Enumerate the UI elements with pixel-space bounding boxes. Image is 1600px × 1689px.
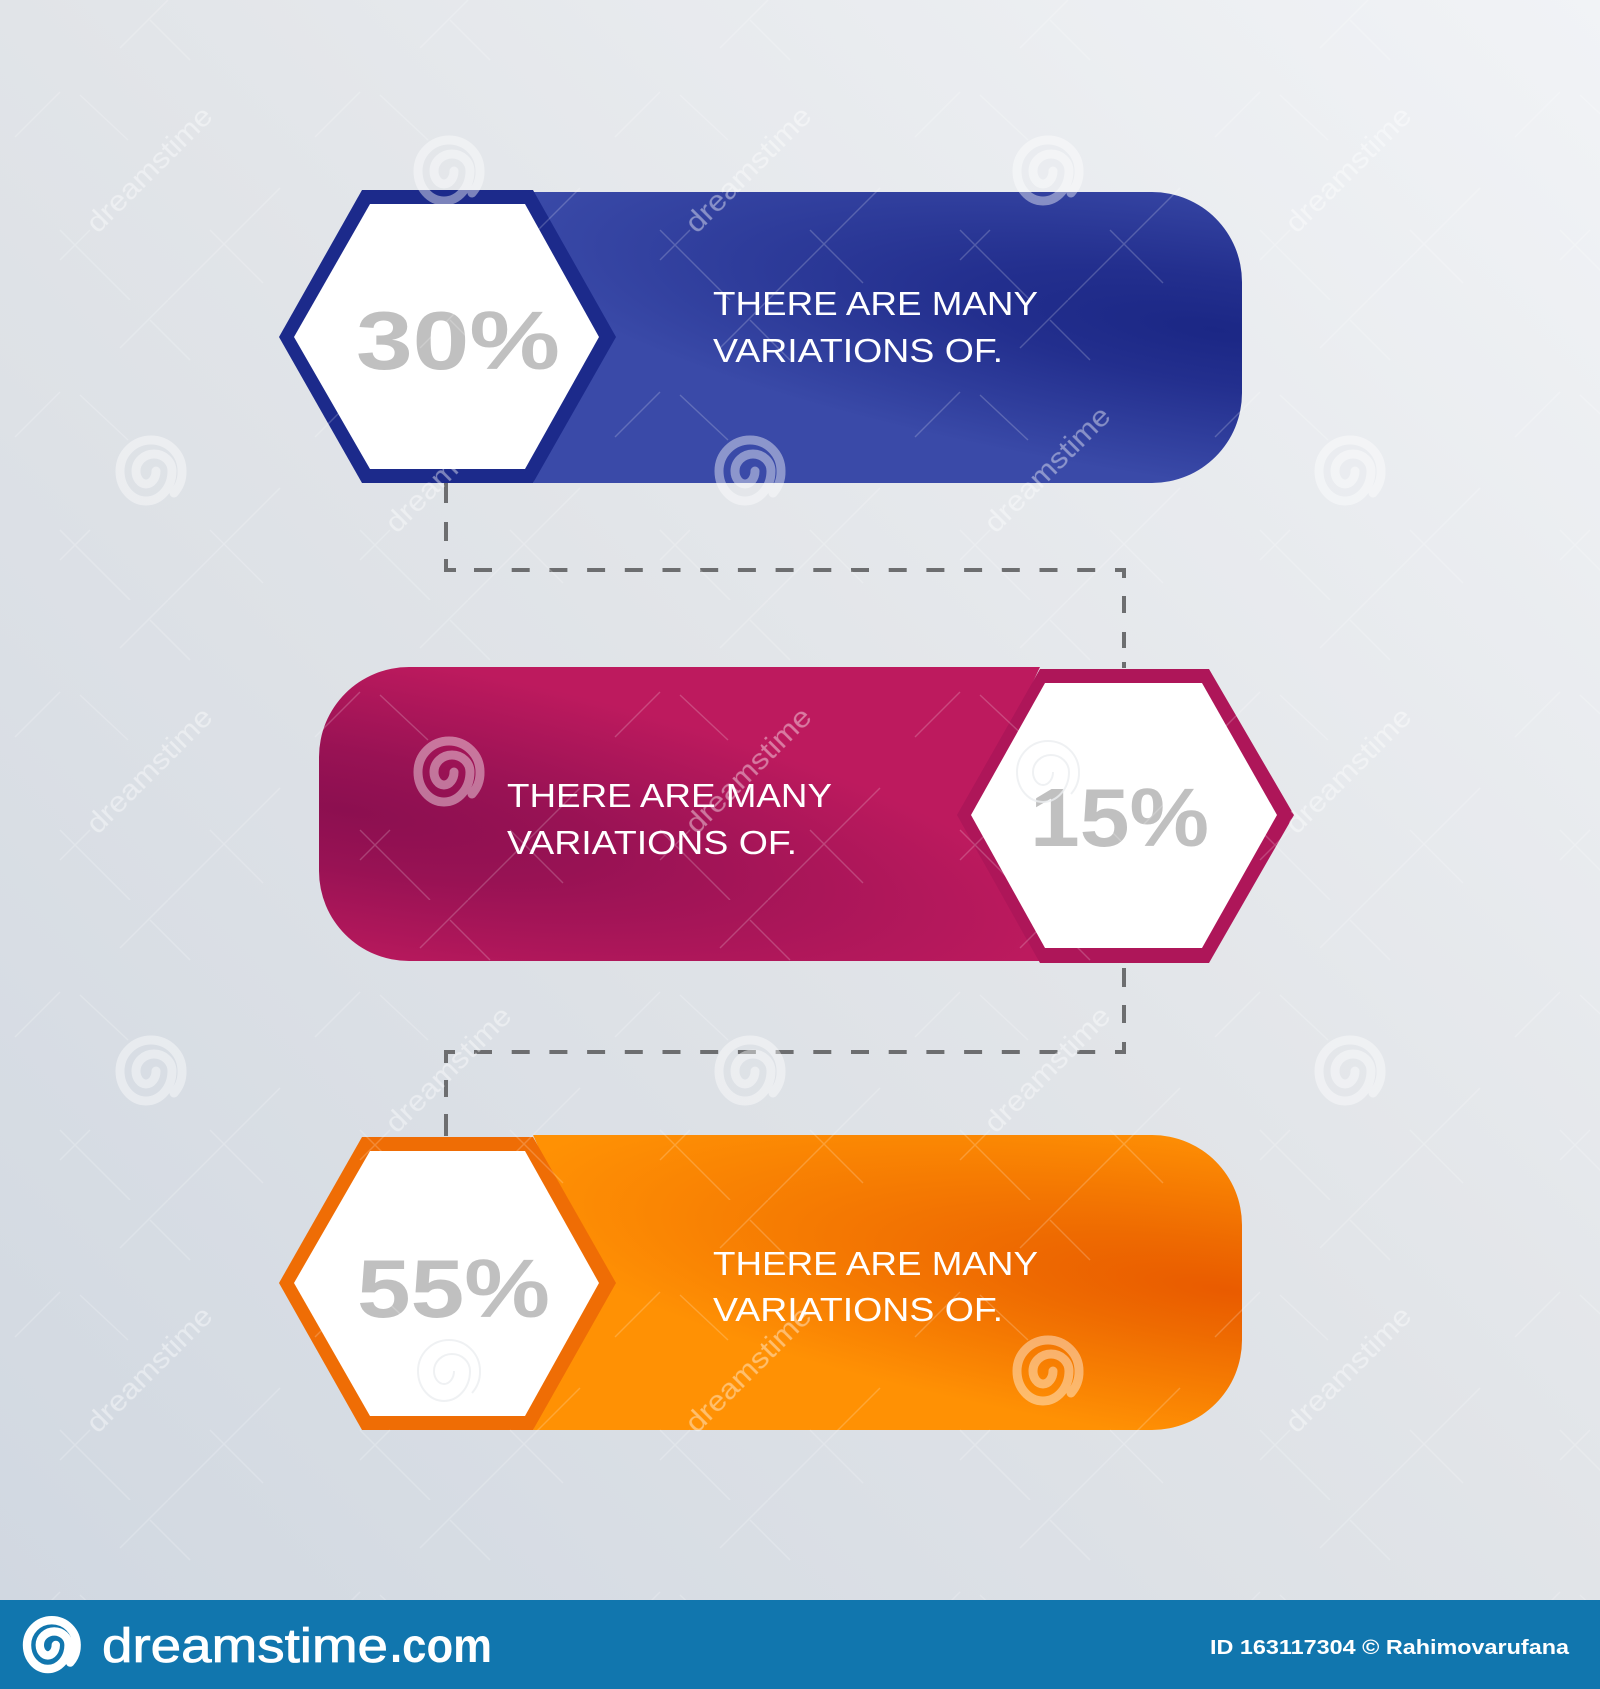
watermark: dreamstime text repeats: dreamstime <box>80 1300 219 1439</box>
watermark: dreamstime text repeats <box>80 100 1418 1439</box>
watermark: faint spirals on white hexagons <box>418 741 1079 1401</box>
panel: 55% orange bar <box>279 1135 1242 1430</box>
watermark: dreamstime text repeats: dreamstime <box>978 1000 1117 1139</box>
watermark: dreamstime text repeats: dreamstime <box>379 1000 518 1139</box>
hexagon: 15% <box>957 669 1294 963</box>
watermark: dreamstime text repeats: dreamstime <box>679 701 818 840</box>
text: magenta bar description: VARIATIONS OF. <box>507 825 797 862</box>
watermark: dreamstime text repeats: dreamstime <box>1279 701 1418 840</box>
orange bar shape <box>533 1135 1242 1430</box>
watermark: dreamstime text repeats: dreamstime <box>80 100 219 239</box>
value: 30%: 30% <box>356 294 560 387</box>
text: blue bar description: VARIATIONS OF. <box>713 333 1003 370</box>
logo wordmark: .com <box>390 1620 492 1673</box>
value: 55%: 55% <box>357 1242 550 1335</box>
text: magenta bar description: THERE ARE MANY <box>507 778 832 815</box>
watermark: spirals <box>120 140 1381 1401</box>
text: orange bar description: VARIATIONS OF. <box>713 1292 1003 1329</box>
value: 15%: 15% <box>1030 771 1209 864</box>
magenta bar shape <box>319 667 1040 961</box>
watermark: dreamstime text repeats: dreamstime <box>1279 1300 1418 1439</box>
logo wordmark: dreamstime <box>102 1620 388 1673</box>
watermark: dreamstime text repeats: dreamstime <box>379 400 518 539</box>
watermark: dreamstime text repeats: dreamstime <box>1279 100 1418 239</box>
panel: 30% blue bar <box>279 190 1242 483</box>
connector: dashed line from 15% to 55% <box>446 968 1124 1136</box>
image id and credit: ID 163117304 © Rahimovarufana <box>1210 1637 1570 1659</box>
text: orange bar description: THERE ARE MANY <box>713 1246 1038 1283</box>
logo wordmark <box>102 1620 492 1673</box>
footer bar <box>0 1600 1600 1689</box>
hexagon: 55% <box>279 1137 616 1430</box>
icon: dreamstime spiral logo <box>27 1620 77 1669</box>
connector: dashed line from 30% to 15% <box>446 483 1124 668</box>
watermark: dreamstime text repeats: dreamstime <box>80 701 219 840</box>
hexagon: 30% <box>279 190 616 483</box>
panel: 15% magenta bar <box>319 667 1294 963</box>
text: blue bar description: THERE ARE MANY <box>713 286 1038 323</box>
watermark: dreamstime text repeats: dreamstime <box>978 400 1117 539</box>
watermark: dreamstime text repeats: dreamstime <box>679 1300 818 1439</box>
blue bar shape <box>533 192 1242 483</box>
watermark: dreamstime text repeats: dreamstime <box>679 100 818 239</box>
